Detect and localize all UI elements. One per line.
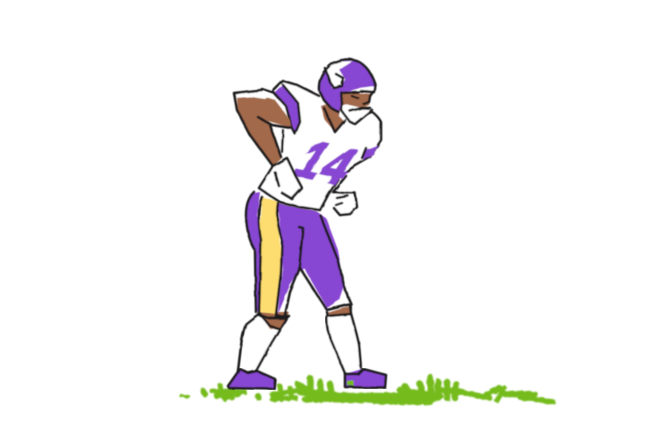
- jersey: [259, 81, 381, 210]
- front leg: sock and shin: [327, 305, 363, 373]
- helmet shell: [320, 60, 375, 110]
- pants: side stripe: [259, 197, 282, 314]
- helmet: [319, 59, 375, 132]
- right arm and fist: [325, 176, 357, 215]
- back shoe: [228, 369, 275, 389]
- helmet wing: [325, 63, 345, 88]
- left arm: [234, 90, 292, 166]
- sleeve purple band: [274, 85, 300, 134]
- neck and face: [321, 92, 372, 132]
- pants: outer purple panel: [246, 192, 261, 312]
- glove hand: [273, 158, 302, 199]
- pants: [246, 192, 351, 318]
- right sleeve purple band: [363, 145, 378, 160]
- jersey number 14: 14: [283, 131, 369, 195]
- grass: [181, 377, 553, 402]
- pants: ink outlines: [246, 192, 351, 318]
- back leg: sock and shin: [238, 312, 289, 372]
- pants: main purple panel: [278, 203, 344, 314]
- facemask: [339, 104, 370, 124]
- helmet outline: [319, 59, 375, 112]
- front shoe: [345, 369, 386, 388]
